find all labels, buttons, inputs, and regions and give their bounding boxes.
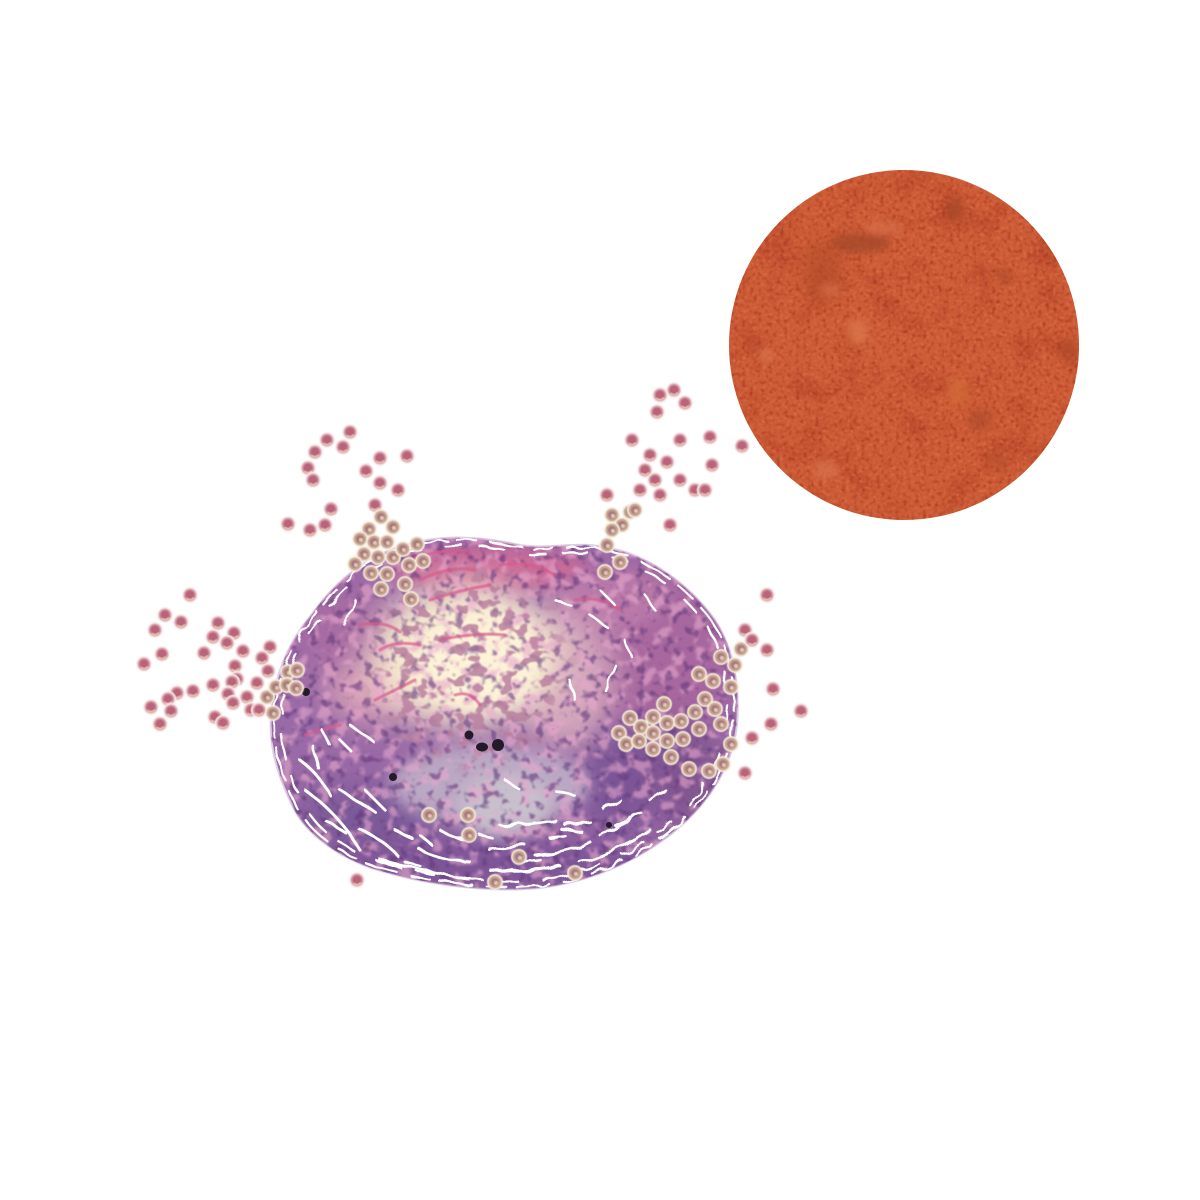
concentric white clefts bbox=[274, 540, 734, 887]
tissue colour zones bbox=[290, 546, 730, 891]
cell cluster: top left bbox=[280, 424, 431, 607]
pink fibres bbox=[305, 551, 620, 735]
powder lumps and shadows bbox=[759, 198, 1076, 480]
cell cluster: left bbox=[136, 587, 305, 732]
cells on lower tissue bbox=[349, 807, 583, 890]
powder circle: orange-red pigment bbox=[729, 170, 1079, 520]
tissue mass: purple and pink stained section bbox=[260, 530, 750, 900]
cell cluster: top right bbox=[597, 382, 750, 580]
dark nuclei bbox=[302, 688, 612, 828]
cell cluster: right bbox=[611, 587, 809, 781]
